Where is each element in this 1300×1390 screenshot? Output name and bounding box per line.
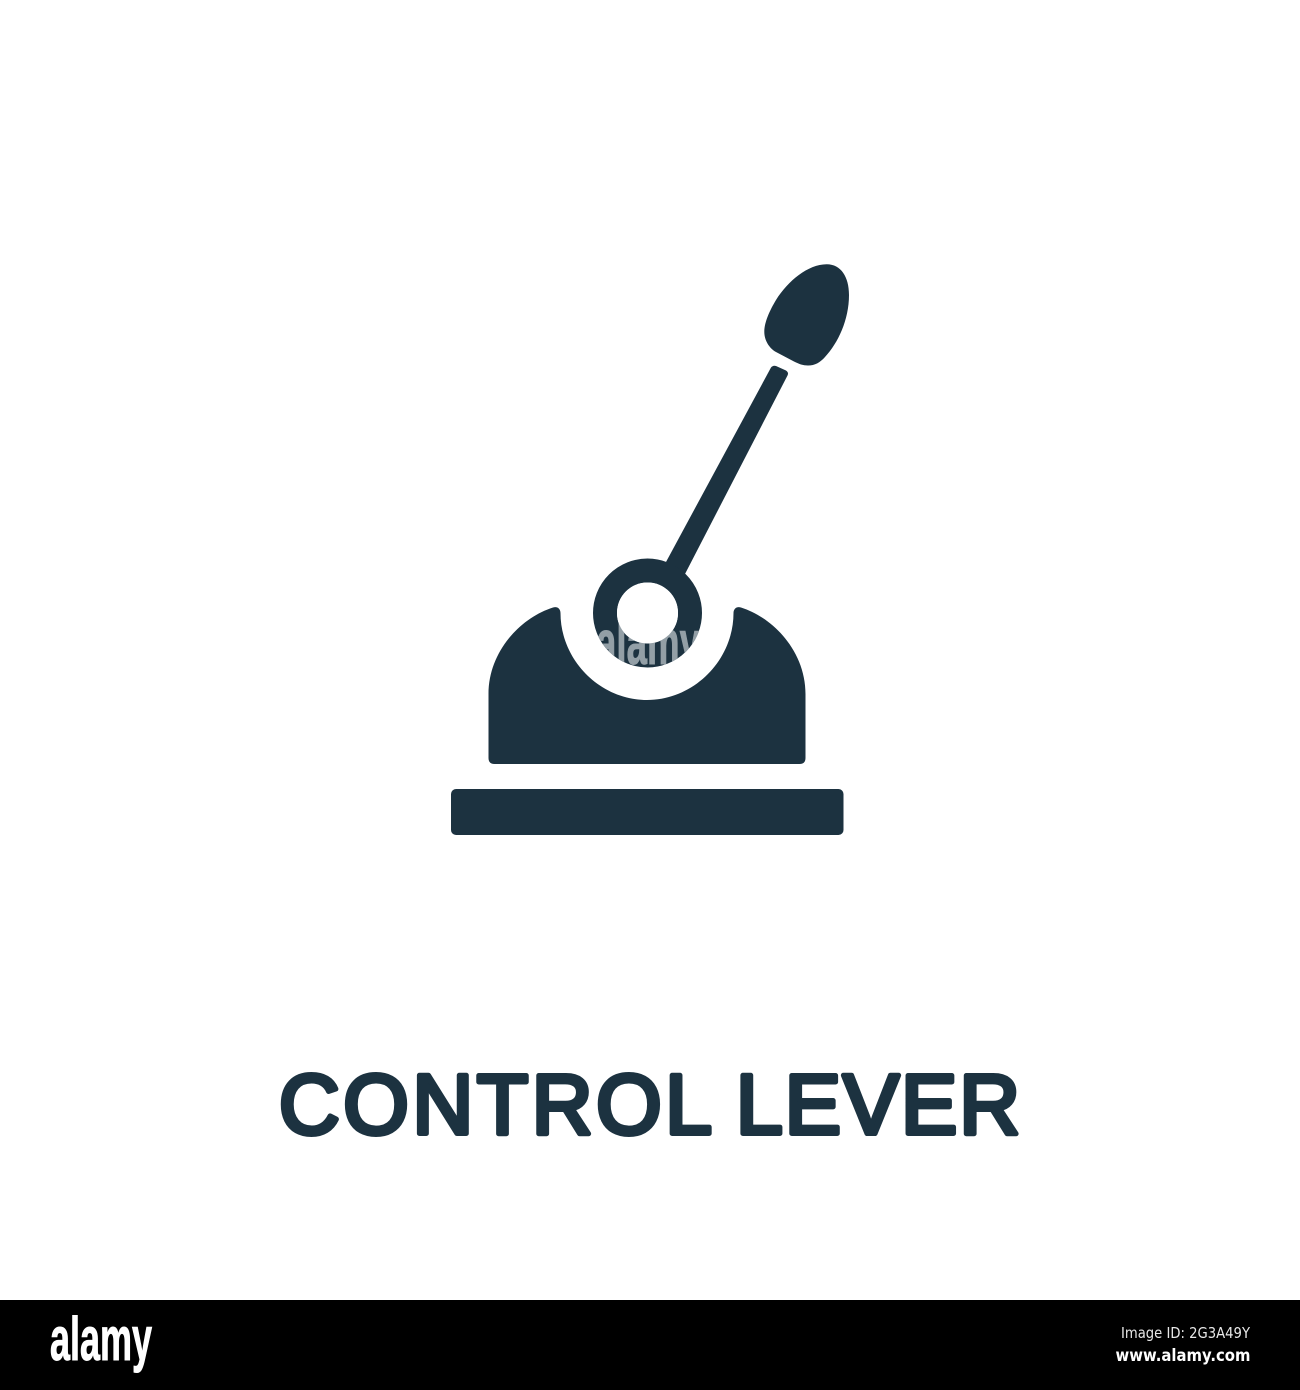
lever knob [764, 264, 849, 366]
title: LEVER [736, 1058, 1020, 1152]
lever base dome [488, 607, 806, 764]
footer logo: alamy [50, 1305, 152, 1373]
base plate [451, 789, 844, 835]
title [279, 1058, 1020, 1152]
watermark on ring: alamy [596, 609, 700, 678]
image id: Image ID: 2G3A49Y [1121, 1324, 1251, 1342]
title: CONTROL [279, 1058, 712, 1152]
website: www.alamy.com [1116, 1346, 1250, 1366]
icon: control lever [451, 264, 849, 835]
ring hole [617, 582, 678, 644]
lever pivot ring [605, 570, 690, 656]
lever shaft [666, 366, 788, 574]
footer bar [0, 1300, 1300, 1390]
